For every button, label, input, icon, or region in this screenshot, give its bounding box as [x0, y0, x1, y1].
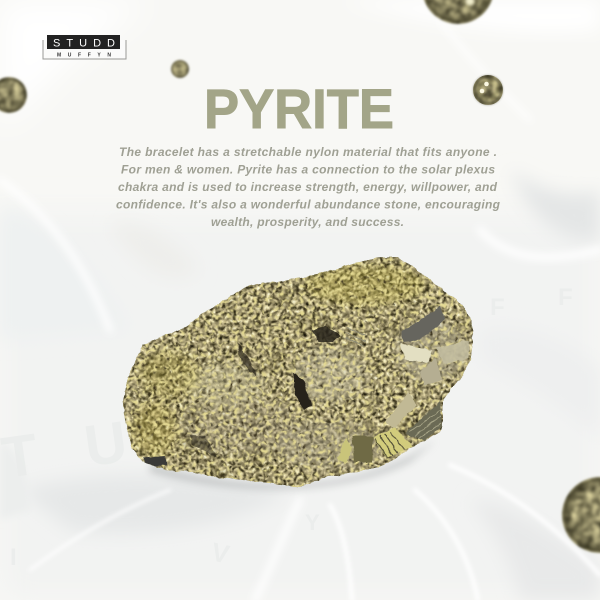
- description text: chakra and is used to increase strength, energy, willpower, and: [118, 180, 498, 194]
- logo: Studd Muffyn: MUFFYN: [57, 52, 111, 58]
- description text: [116, 145, 501, 229]
- rock cracks: [143, 326, 340, 468]
- description text: The bracelet has a stretchable nylon material that fits anyone .: [119, 145, 497, 159]
- watermark text: I: [10, 544, 17, 571]
- bead: right of title: [472, 74, 504, 106]
- pyrite rock: [115, 250, 480, 495]
- title: PYRITE: [204, 77, 394, 140]
- bead: lower right: [560, 475, 600, 555]
- pyrite rock shadow: [150, 440, 436, 489]
- striated crystals: [405, 402, 442, 441]
- pale crystal faces: [400, 344, 432, 362]
- watermark text: F: [558, 284, 573, 311]
- bead: left: [0, 76, 28, 114]
- description text: wealth, prosperity, and success.: [211, 215, 404, 229]
- grey crystal face: [402, 306, 445, 342]
- logo: Studd Muffyn: STUDD: [53, 38, 115, 50]
- watermark text: [0, 284, 573, 571]
- bead: top right: [420, 0, 496, 26]
- description text: For men & women. Pyrite has a connection to the solar plexus: [121, 162, 495, 176]
- watermark text: F: [490, 294, 505, 321]
- description text: confidence. It's also a wonderful abundance stone, encouraging: [116, 198, 501, 212]
- watermark text: V: [209, 537, 233, 570]
- watermark text: T U: [0, 407, 147, 491]
- rock tonal patches: [133, 265, 465, 469]
- watermark text: Y: [305, 510, 320, 535]
- logo: Studd Muffyn: [43, 35, 126, 59]
- bead: small: [170, 59, 190, 79]
